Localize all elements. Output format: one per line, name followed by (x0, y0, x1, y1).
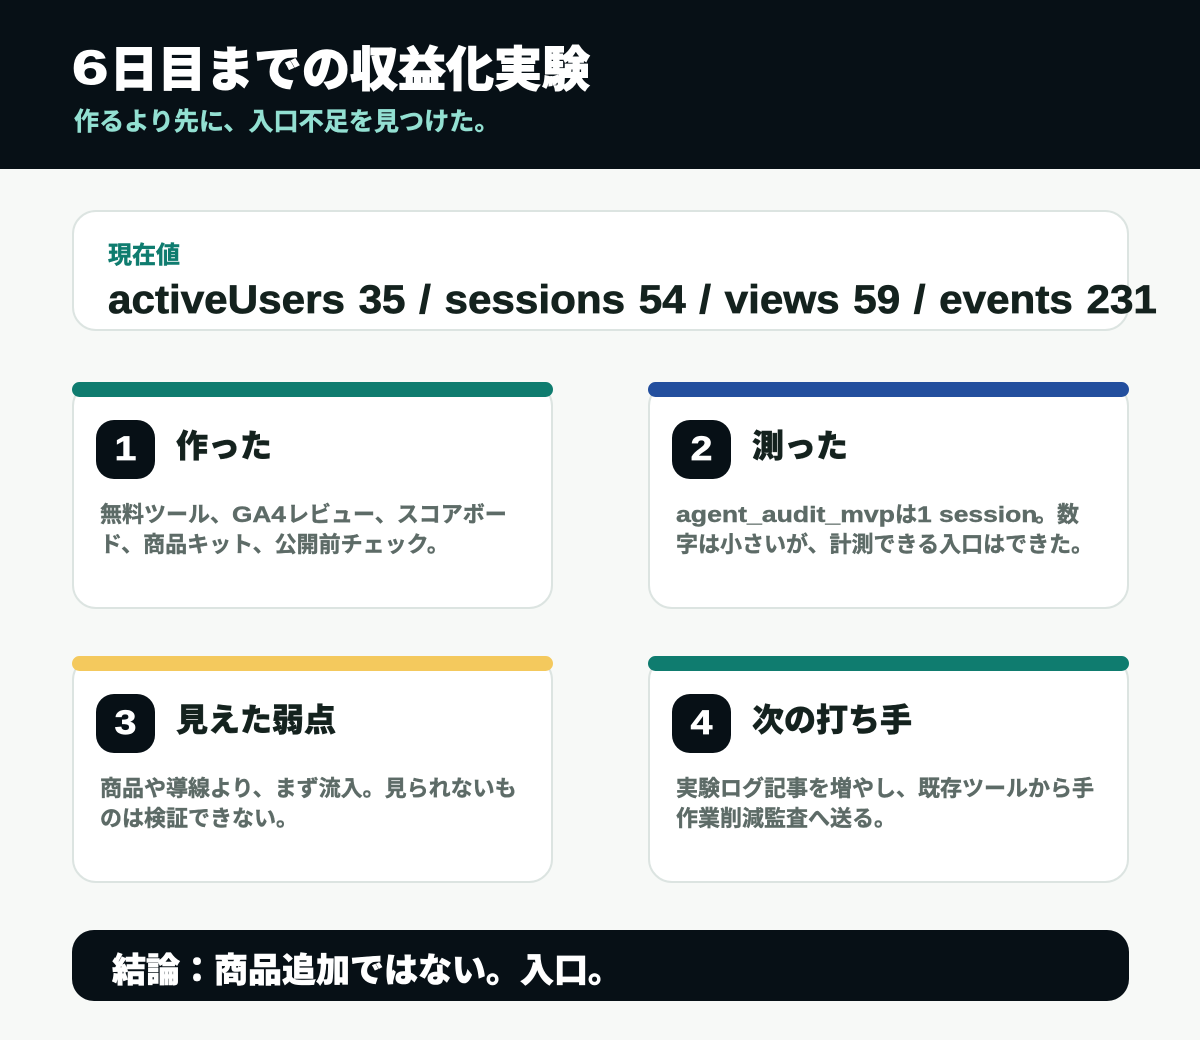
heading: 見えた弱点 (176, 695, 336, 741)
conclusion text: 結論：商品追加ではない。入口。 (112, 943, 622, 992)
body text: 商品や導線より、まず流入。見られないも (100, 776, 517, 801)
number badge 4 (672, 694, 731, 753)
label: current values: 現在値 (108, 242, 180, 269)
body text: 無料ツール、 レビュー、スコアボー (100, 502, 507, 527)
title: 日目までの収益化実験 (110, 44, 590, 97)
panel: step 1 (72, 382, 553, 609)
panel: step 2 (648, 382, 1129, 609)
body text: 字は小さいが、計測できる入口はできた。 (676, 532, 1093, 557)
number badge 3: 3 (115, 704, 136, 742)
title: 6 (72, 42, 108, 95)
body text (100, 502, 507, 557)
body text: GA4 (232, 502, 286, 527)
number badge 1: 1 (115, 430, 136, 468)
subtitle: 作るより先に、入口不足を見つけた。 (74, 108, 499, 136)
body text: 1 session (917, 502, 1037, 527)
panel: current values (72, 210, 1129, 331)
number badge 4: 4 (691, 704, 712, 742)
panel: step 3 (72, 656, 553, 883)
number badge 1 (96, 420, 155, 479)
metric values: activeUsers 35 / sessions 54 / views 59 / events 231 (108, 278, 1157, 322)
body text: は 。数 (895, 502, 1079, 527)
number badge 3 (96, 694, 155, 753)
body text: ド、商品キット、公開前チェック。 (100, 532, 449, 557)
body text: agent_audit_mvp (676, 502, 895, 527)
accent bar (648, 656, 1129, 671)
body text (100, 776, 517, 831)
body text (676, 776, 1094, 831)
heading: 作った (176, 421, 272, 467)
body text: のは検証できない。 (100, 806, 298, 831)
body text: 実験ログ記事を増やし、既存ツールから手 (676, 776, 1094, 801)
accent bar (72, 656, 553, 671)
number badge 2 (672, 420, 731, 479)
accent bar (648, 382, 1129, 397)
heading: 次の打ち手 (752, 695, 912, 741)
body text (676, 502, 1093, 557)
panel: step 4 (648, 656, 1129, 883)
heading: 測った (752, 421, 848, 467)
number badge 2: 2 (691, 430, 712, 468)
body text: 作業削減監査へ送る。 (676, 806, 896, 831)
accent bar (72, 382, 553, 397)
header band (0, 0, 1200, 169)
conclusion banner (72, 930, 1129, 1001)
